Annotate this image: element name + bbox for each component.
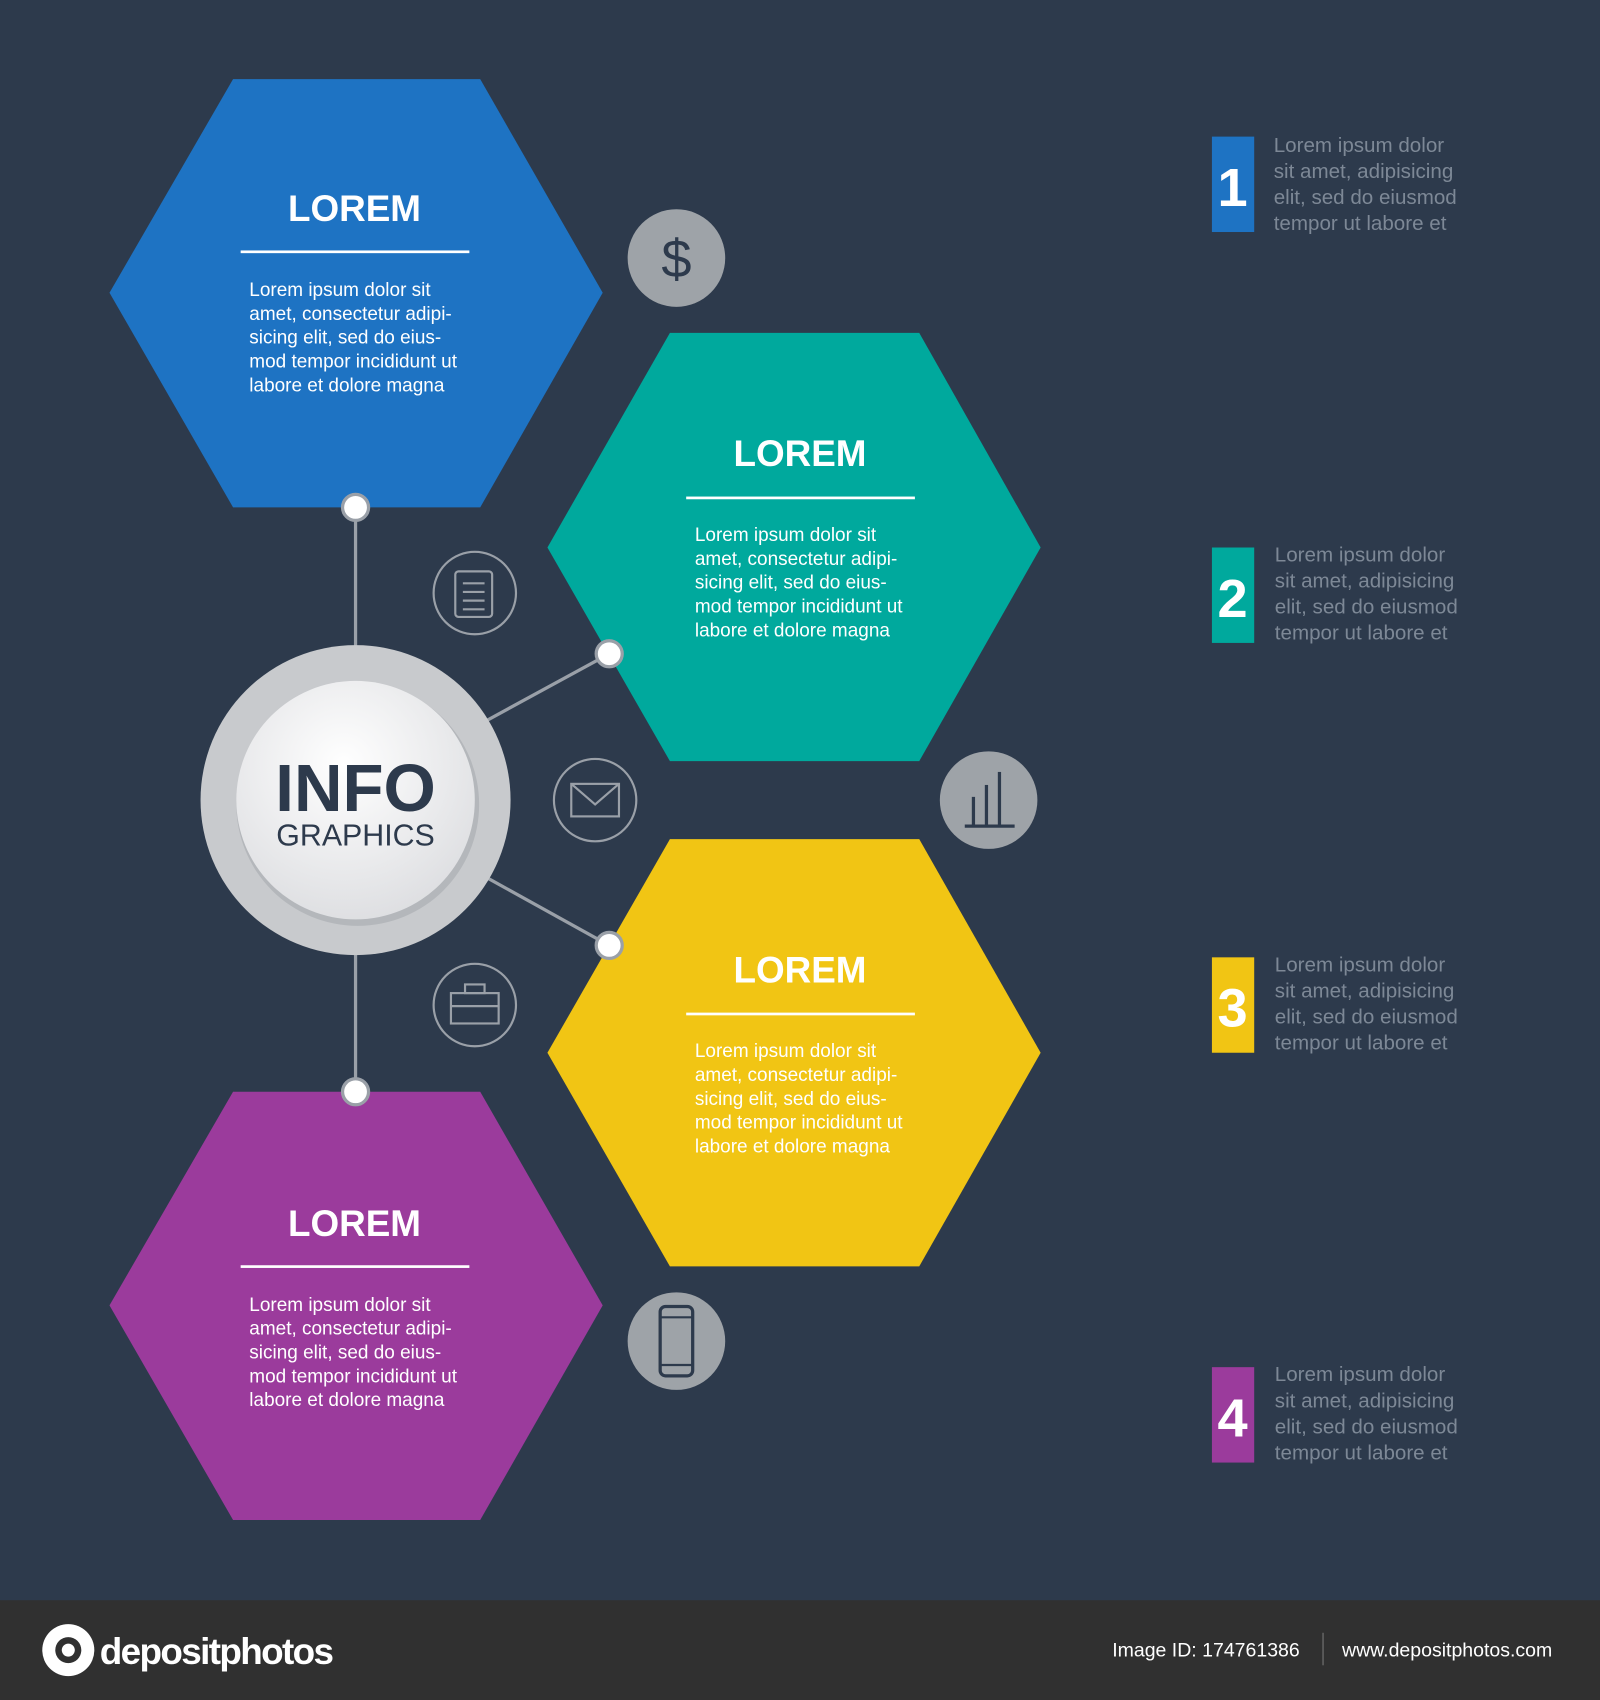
list item 4: tempor ut labore et xyxy=(1275,1441,1448,1464)
list item 2: elit, sed do eiusmod xyxy=(1275,596,1458,619)
icon: dollar xyxy=(628,209,725,307)
center circle: info graphics: INFO xyxy=(275,751,436,826)
list item 3 xyxy=(1212,953,1458,1054)
list item 3: tempor ut labore et xyxy=(1275,1031,1448,1054)
hexagon: yellow: mod tempor incididunt ut xyxy=(695,1113,903,1134)
connector nodes xyxy=(343,494,622,1105)
hexagon: teal xyxy=(547,333,1041,761)
hexagon: blue: LOREM xyxy=(288,188,421,229)
footer bar: depositphotos xyxy=(100,1631,332,1672)
list item 1: elit, sed do eiusmod xyxy=(1274,186,1457,209)
footer bar: www.depositphotos.com xyxy=(1341,1640,1552,1662)
footer bar: Image ID: 174761386 xyxy=(1112,1640,1300,1662)
list item 4: 4 xyxy=(1217,1389,1248,1449)
list item 4: elit, sed do eiusmod xyxy=(1275,1415,1458,1438)
hexagon: blue: labore et dolore magna xyxy=(249,375,445,396)
icon: envelope xyxy=(554,759,636,841)
hexagon: yellow: sicing elit, sed do eius- xyxy=(695,1089,887,1110)
hexagon: yellow: LOREM xyxy=(733,949,867,990)
hexagon: yellow xyxy=(547,839,1041,1266)
hexagon: teal: Lorem ipsum dolor sit xyxy=(695,525,877,546)
list item 2: sit amet, adipisicing xyxy=(1275,570,1454,593)
list item 2: 2 xyxy=(1217,569,1248,629)
hexagon: purple: Lorem ipsum dolor sit xyxy=(249,1295,431,1316)
list item 1: 1 xyxy=(1217,158,1248,218)
hexagon: teal: labore et dolore magna xyxy=(695,620,890,641)
hexagon: blue xyxy=(109,79,603,507)
list item 4 xyxy=(1212,1363,1458,1464)
list item 2: tempor ut labore et xyxy=(1275,622,1448,645)
list item 1 xyxy=(1212,134,1457,235)
footer bar xyxy=(0,1600,1600,1700)
hexagon: yellow: labore et dolore magna xyxy=(695,1136,890,1157)
hexagon: teal: amet, consectetur adipi- xyxy=(695,549,897,570)
center circle: info graphics xyxy=(201,645,511,955)
list item 4: sit amet, adipisicing xyxy=(1275,1389,1454,1412)
hexagon: purple xyxy=(109,1092,603,1520)
hexagon: purple: sicing elit, sed do eius- xyxy=(249,1342,441,1363)
list item 3: elit, sed do eiusmod xyxy=(1275,1005,1458,1028)
hexagon: blue: sicing elit, sed do eius- xyxy=(249,328,441,349)
icon: document xyxy=(434,552,516,634)
hexagon: purple: LOREM xyxy=(288,1203,421,1244)
center circle: info graphics: GRAPHICS xyxy=(276,820,435,853)
icon: dollar: $ xyxy=(661,230,691,290)
list item 3: 3 xyxy=(1217,979,1248,1039)
hexagon: yellow: Lorem ipsum dolor sit xyxy=(695,1041,877,1062)
connectors xyxy=(356,507,609,1092)
icon: briefcase xyxy=(434,964,516,1046)
icon: phone xyxy=(628,1292,725,1390)
hexagon: purple: mod tempor incididunt ut xyxy=(249,1366,458,1387)
hexagon: teal: LOREM xyxy=(733,433,867,474)
hexagon: yellow: amet, consectetur adipi- xyxy=(695,1065,897,1086)
list item 3: Lorem ipsum dolor xyxy=(1275,953,1445,976)
hexagon: blue: mod tempor incididunt ut xyxy=(249,352,458,373)
list item 1: tempor ut labore et xyxy=(1274,212,1447,235)
hexagon: purple: labore et dolore magna xyxy=(249,1390,445,1411)
list item 2: Lorem ipsum dolor xyxy=(1275,544,1445,567)
list item 3: sit amet, adipisicing xyxy=(1275,979,1454,1002)
hexagon: blue: amet, consectetur adipi- xyxy=(249,304,452,325)
hexagon: blue: Lorem ipsum dolor sit xyxy=(249,280,431,301)
icon: bar chart xyxy=(940,751,1037,849)
hexagon: purple: amet, consectetur adipi- xyxy=(249,1319,452,1340)
list item 1: Lorem ipsum dolor xyxy=(1274,134,1444,157)
list item 4: Lorem ipsum dolor xyxy=(1275,1363,1445,1386)
hexagon: teal: mod tempor incididunt ut xyxy=(695,597,903,618)
list item 2 xyxy=(1212,544,1458,645)
list item 1: sit amet, adipisicing xyxy=(1274,160,1453,183)
hexagon: teal: sicing elit, sed do eius- xyxy=(695,573,887,594)
